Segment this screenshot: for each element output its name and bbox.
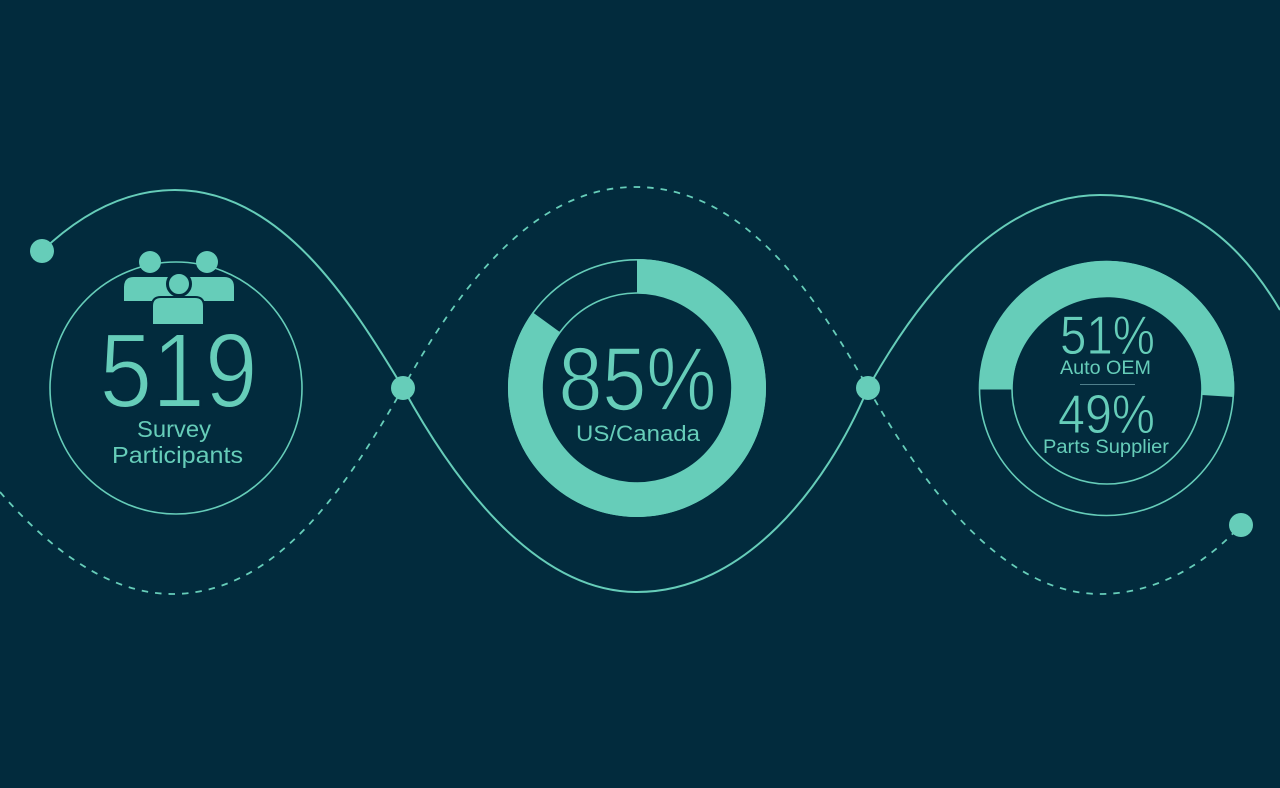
ring outline (509, 260, 765, 516)
number 51%: 51% (1060, 304, 1155, 366)
solid wave line (42, 190, 1280, 592)
number 519: 519 (100, 312, 258, 430)
ring outline (980, 262, 1234, 516)
donut 51 percent (979, 261, 1234, 397)
panel: survey participants: Participants (112, 442, 243, 468)
panel: auto OEM vs parts supplier (979, 261, 1234, 516)
panel: survey participants (50, 251, 302, 514)
label: Survey (137, 416, 211, 442)
number 49%: 49% (1058, 383, 1155, 445)
number 85%: 85% (558, 330, 716, 430)
connector nodes (30, 239, 1253, 537)
label Auto OEM: Auto OEM (1060, 358, 1151, 379)
donut 85 percent (508, 259, 766, 517)
divider (1080, 384, 1135, 385)
icon: people group (124, 251, 234, 325)
panel: US/Canada donut (508, 259, 766, 517)
ring outline (50, 262, 302, 514)
label: US/Canada (576, 421, 701, 446)
label Parts Supplier: Parts Supplier (1043, 437, 1170, 458)
dashed wave line (0, 187, 1241, 594)
